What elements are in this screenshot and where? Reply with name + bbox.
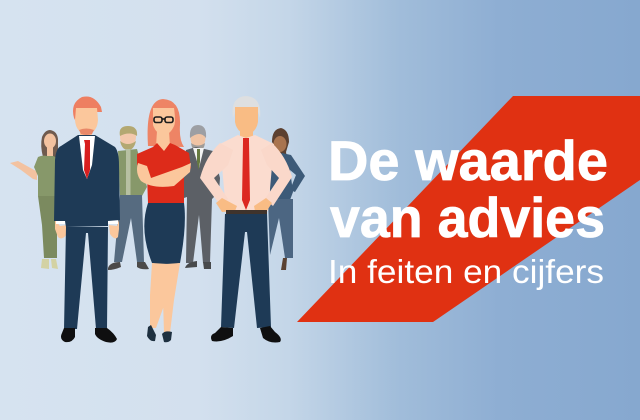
- subtitle: In feiten en cijfers: [328, 253, 604, 290]
- figure: dark-skinned woman in blue, back right: [268, 128, 305, 270]
- shirt torso: [220, 135, 274, 211]
- title: van advies: [330, 186, 605, 249]
- figure: woman in red top, front centre: [137, 99, 191, 342]
- figure: older man in pink shirt, front right: [200, 96, 292, 342]
- figure: man in navy suit, front left: [54, 96, 120, 343]
- figure: grey suited man, back: [179, 125, 220, 269]
- title: [328, 129, 608, 249]
- figure: bearded man, back: [108, 126, 149, 270]
- title: De waarde: [328, 129, 608, 192]
- right arm: [261, 143, 292, 206]
- red diagonal banner: [297, 96, 640, 322]
- left arm: [200, 143, 233, 205]
- figure: woman in green, back left: [10, 130, 58, 269]
